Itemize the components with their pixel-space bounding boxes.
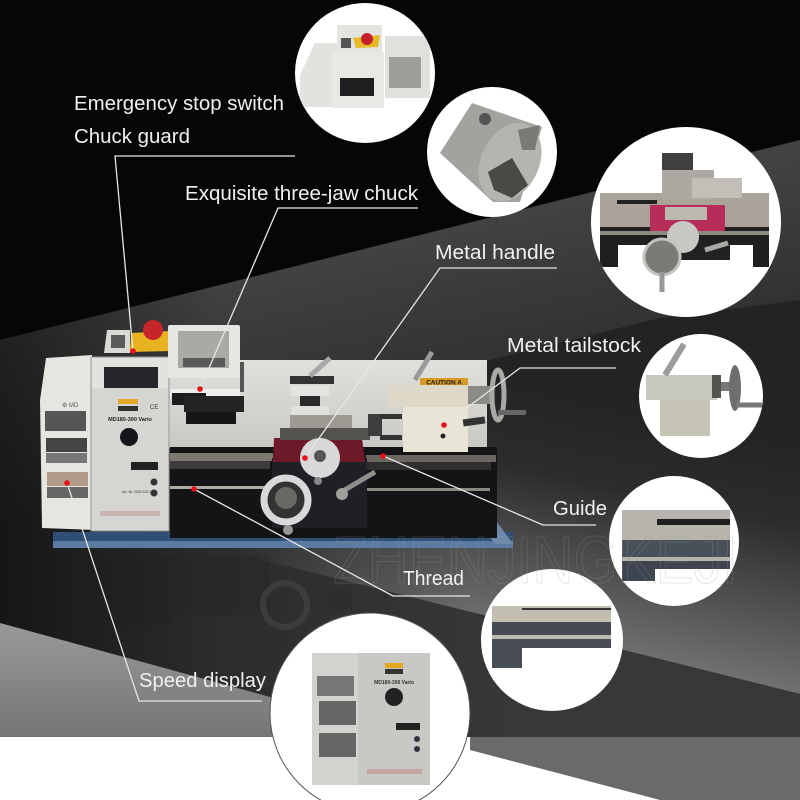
- callout: exquisite three-jaw chuck: Exquisite three-jaw chuck: [185, 183, 419, 205]
- callout: chuck guard: Chuck guard: [74, 126, 190, 148]
- control panel: [91, 357, 169, 531]
- circle: thread detail: [481, 569, 623, 711]
- callout: emergency stop switch: Emergency stop switch: [74, 93, 284, 115]
- cross feed handwheel: [300, 438, 340, 485]
- carriage apron: [272, 458, 367, 528]
- callout: chuck guard: [74, 126, 295, 354]
- circle: speed display panel detail: [270, 613, 470, 800]
- rear wall: [167, 360, 487, 448]
- yellow emergency stop housing: [130, 320, 171, 352]
- carriage lever: [336, 472, 375, 500]
- electrical box with switch: [104, 330, 130, 353]
- gear chart plates: ⚙ MD: [62, 402, 79, 409]
- circle: three-jaw chuck detail: [427, 87, 557, 217]
- gear chart plates: [45, 402, 88, 498]
- callout: speed display: Speed display: [139, 670, 266, 692]
- carriage handwheel: [264, 478, 308, 535]
- lathe reflection: [45, 555, 352, 627]
- control panel: CE: [150, 405, 158, 411]
- headstock end cover: [40, 355, 96, 530]
- callout: guide: [380, 453, 607, 525]
- callout: metal tailstock: Metal tailstock: [507, 335, 642, 357]
- chuck guard: [168, 325, 244, 392]
- zhenjing watermark: ZHENJINGKEJI: [333, 523, 738, 598]
- circle: tailstock detail: [639, 334, 763, 458]
- main lathe machine: [40, 320, 526, 548]
- circle: guide detail: [609, 476, 739, 606]
- callout: speed display: [64, 480, 266, 701]
- tailstock: CAUTION A: [426, 380, 462, 386]
- callout: thread: Thread: [403, 568, 464, 590]
- callout: metal handle: [302, 242, 557, 461]
- red cross slide: [273, 438, 365, 462]
- control panel: Art.-Nr. 2000-DG-00: [122, 490, 153, 494]
- lathe bed: [170, 447, 497, 538]
- tailstock: [380, 352, 526, 452]
- control panel: MD180-300 Vario: [108, 417, 152, 423]
- callout: metal handle: Metal handle: [435, 242, 555, 264]
- circle: emergency stop detail: [295, 3, 435, 143]
- blue base tray: [53, 510, 513, 548]
- callout: thread: [191, 486, 470, 596]
- three-jaw chuck: [170, 389, 244, 424]
- compound slide and tool post: [280, 358, 382, 440]
- callout: exquisite three-jaw chuck: [185, 183, 419, 392]
- callout: metal tailstock: [441, 335, 642, 428]
- circle: speed display panel detail: MD180-300 Vario: [374, 680, 414, 686]
- circle: carriage detail: [591, 127, 781, 317]
- callout: guide: Guide: [553, 498, 607, 520]
